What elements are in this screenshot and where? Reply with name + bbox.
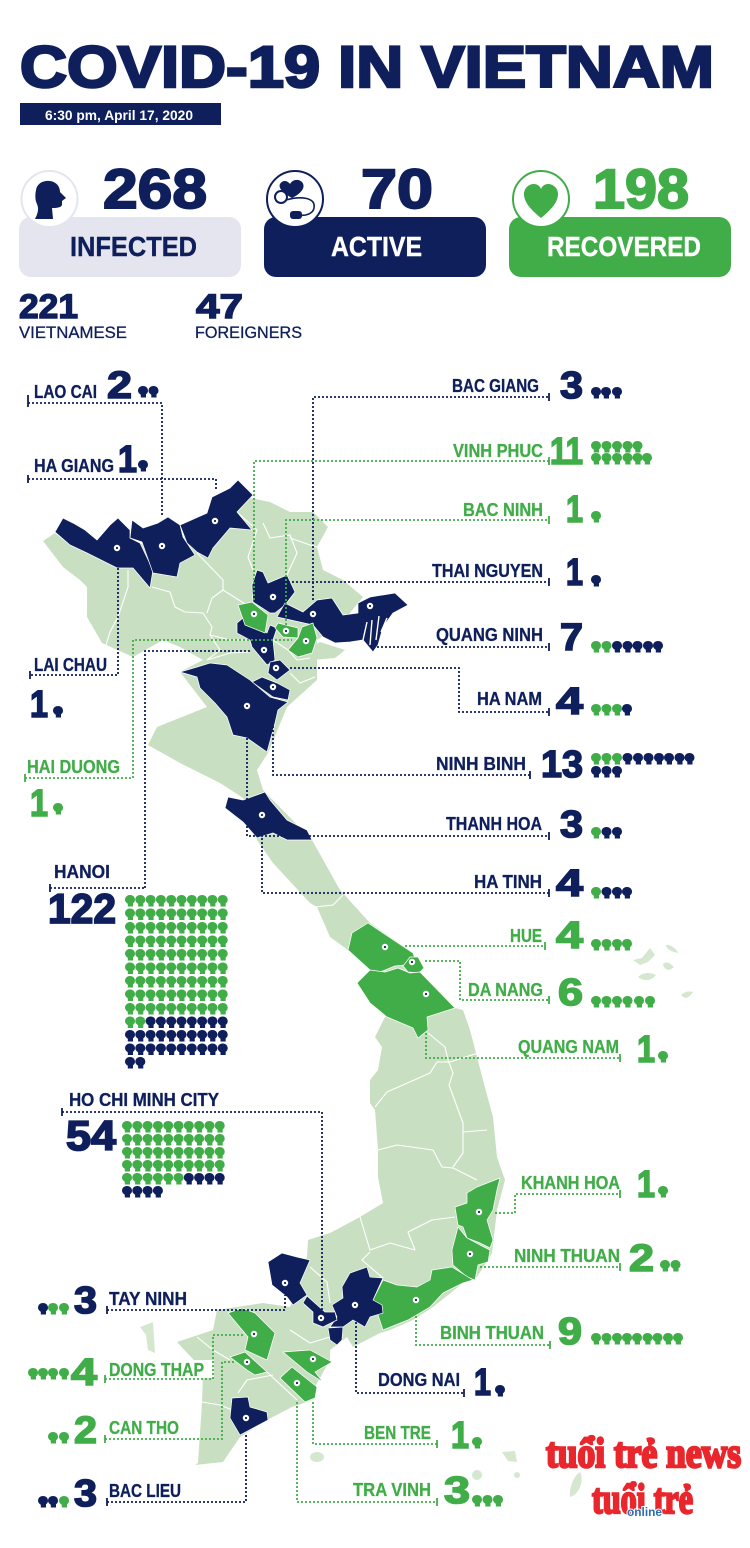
callout: Hai Duong: 1 [30,783,48,825]
callout: Ho Chi Minh City: HO CHI MINH CITY [69,1090,219,1110]
callout: Lai Chau [30,655,107,726]
callout: Thai Nguyen [432,552,601,594]
callout: Da Nang: 6 [558,972,583,1014]
province: Ninh Thuan [452,1227,490,1280]
callout: Da Nang: DA NANG [468,980,543,1000]
callout: Lao Cai: 2 [107,365,132,407]
stat: vietnamese: VIETNAMESE [19,323,127,342]
province: Bac Lieu [230,1397,268,1435]
callout: Vinh Phuc [453,431,652,473]
callout: Ho Chi Minh City [66,1090,225,1198]
callout: Bac Lieu: BAC LIEU [109,1481,181,1501]
callout: Binh Thuan: BINH THUAN [440,1323,544,1343]
callout: Bac Giang: 3 [560,365,583,407]
panel: infected: 268 [103,157,207,220]
province: Bac Giang and Quang Ninh [277,593,408,652]
callout: Quang Ninh: QUANG NINH [436,625,543,645]
province: Khanh Hoa [455,1178,500,1248]
province: Vinh Phuc [238,602,268,633]
callout: Bac Lieu [38,1473,181,1515]
province: Hue [348,923,420,972]
callout: Hanoi [48,862,228,1068]
panel: recovered: RECOVERED [547,231,701,262]
callout: Tra Vinh: TRA VINH [353,1480,431,1500]
pictogram: Hanoi 122 cases [125,895,228,1068]
callout: Ninh Thuan [514,1238,680,1280]
province marker dots [114,518,482,1421]
callout: Lai Chau: LAI CHAU [34,655,107,675]
callout: Ha Nam [477,681,632,723]
callout: Tra Vinh: 3 [444,1470,470,1512]
province: Ha Nam [268,660,290,680]
callout: Binh Thuan [440,1311,683,1353]
callout: Bac Giang: BAC GIANG [452,376,539,396]
callout: Khanh Hoa: 1 [637,1164,655,1206]
date bar: 6:30 pm, April 17, 2020 [45,107,193,123]
province: Ninh Binh [252,677,290,700]
callout: Hanoi: HANOI [54,862,110,882]
province: Ben Tre [283,1350,332,1382]
province: Tay Ninh [268,1253,310,1305]
callout: Hanoi: 122 [48,885,116,932]
panel: active [264,157,486,277]
callout: Khanh Hoa [521,1164,668,1206]
leader lines [25,393,620,1506]
callout: Tra Vinh [353,1470,503,1512]
panel: infected: INFECTED [70,231,197,262]
callout: Dong Thap [28,1352,204,1394]
callout: Can Tho [48,1410,179,1452]
callout: Ha Nam: 4 [556,681,583,723]
callout: Can Tho: CAN THO [109,1418,179,1438]
province: Da Nang [403,957,424,973]
callout: Quang Ninh: 7 [560,617,583,659]
internal province borders [106,513,487,1410]
map of Vietnam [43,480,693,1497]
province: Dong Nai [330,1267,383,1327]
callout: Bac Lieu: 3 [74,1473,97,1515]
callout: Hai Duong: HAI DUONG [27,757,120,777]
province: Lai Chau [55,518,153,588]
logo: tuoi tre online: tuổi trẻ [592,1477,693,1523]
callout: Bac Ninh [463,489,601,531]
callout: Ben Tre: 1 [451,1415,469,1457]
panel: recovered [509,157,731,277]
province: Bac Ninh [275,623,298,638]
province: Long An [303,1296,337,1327]
callout: Ha Tinh [474,863,632,905]
callout: Tay Ninh: TAY NINH [109,1289,187,1309]
callout: Thanh Hoa: THANH HOA [446,814,542,834]
callout: Da Nang [468,972,655,1014]
callout: Bac Ninh: BAC NINH [463,500,543,520]
callout: Dong Thap: 4 [71,1352,97,1394]
callout: Can Tho: 2 [74,1410,97,1452]
callout: Khanh Hoa: KHANH HOA [521,1173,620,1193]
callout: Tay Ninh: 3 [74,1280,97,1322]
province: Dong Thap [228,1308,275,1360]
islands [140,945,693,1497]
stat: vietnamese [19,288,127,342]
panel: active: 70 [361,157,433,220]
callout: Ninh Binh [436,744,694,786]
callout: Hue: HUE [510,926,542,946]
callout: Ninh Thuan: 2 [629,1238,654,1280]
callout: Quang Nam [518,1029,668,1071]
callout: Binh Thuan: 9 [558,1311,582,1353]
callout: Lai Chau: 1 [30,684,48,726]
callout: Thanh Hoa: 3 [560,804,583,846]
callout: Thai Nguyen: THAI NGUYEN [432,561,543,581]
province: Binh Thuan [373,1267,473,1330]
callout: Ninh Binh: 13 [541,744,583,786]
callout: Ho Chi Minh City: 54 [66,1112,117,1159]
province: Can Tho [230,1352,267,1375]
province: Hai Duong [288,623,317,657]
province: Quang Nam [357,968,455,1038]
callout: Hue: 4 [556,915,583,957]
province: Ho Chi Minh City [328,1327,343,1345]
callout: Thanh Hoa [446,804,622,846]
callout: Ha Tinh: 4 [556,863,583,905]
callout: Tay Ninh [38,1280,187,1322]
callout: Dong Nai: 1 [474,1362,491,1404]
pictogram: Ho Chi Minh City 54 cases [122,1121,225,1198]
province: Ha Giang [180,480,253,558]
callout: Ha Nam: HA NAM [477,689,542,709]
callout: Quang Nam: QUANG NAM [518,1037,619,1057]
callout: Ben Tre [364,1415,482,1457]
callout: Ninh Binh: NINH BINH [436,754,526,774]
callout: Vinh Phuc: VINH PHUC [453,441,543,461]
panel: active: ACTIVE [331,231,422,262]
stat: foreigners: FOREIGNERS [195,323,302,342]
province: Thanh Hoa south [225,792,312,840]
callout: Dong Thap: DONG THAP [109,1360,204,1380]
callout: Quang Nam: 1 [637,1029,655,1071]
panel: recovered: 198 [593,157,689,220]
title: COVID-19 IN VIETNAM [20,35,714,100]
stat: foreigners [195,288,302,342]
province: Lao Cai [130,517,195,577]
province: Thai Nguyen [252,570,295,613]
callout: Ha Giang: HA GIANG [34,456,114,476]
callout: Ben Tre: BEN TRE [364,1423,431,1443]
callout: Hue [510,915,632,957]
callout: Quang Ninh [436,617,663,659]
callout: Dong Nai [378,1362,505,1404]
stat: vietnamese: 221 [19,288,78,326]
stat: foreigners: 47 [196,288,243,326]
province: Thanh Hoa north [180,663,288,752]
callout: Lao Cai [34,365,158,407]
province: Hanoi [237,618,277,665]
callout: Dong Nai: DONG NAI [378,1370,460,1390]
map: Quang Ninh island channels [363,616,387,645]
callout: Ha Giang [34,439,148,481]
logo: tuoi tre online: online [627,1505,662,1519]
callout: Ninh Thuan: NINH THUAN [514,1246,620,1266]
callout: Ha Giang: 1 [118,439,137,481]
province: Tra Vinh [280,1367,317,1402]
callout: Bac Ninh: 1 [566,489,583,531]
callout: Lao Cai: LAO CAI [34,382,97,402]
map base: country outline [43,498,505,1465]
callout: Hai Duong [27,757,120,825]
date bar [20,103,221,125]
callout: Vinh Phuc: 11 [550,431,583,473]
label backing: Dong Thap [105,1360,214,1378]
callout: Thai Nguyen: 1 [566,552,583,594]
callout: Ha Tinh: HA TINH [474,872,542,892]
map: Vietnam delta coast [298,642,345,660]
callout: Bac Giang [452,365,622,407]
panel: infected [19,157,241,277]
